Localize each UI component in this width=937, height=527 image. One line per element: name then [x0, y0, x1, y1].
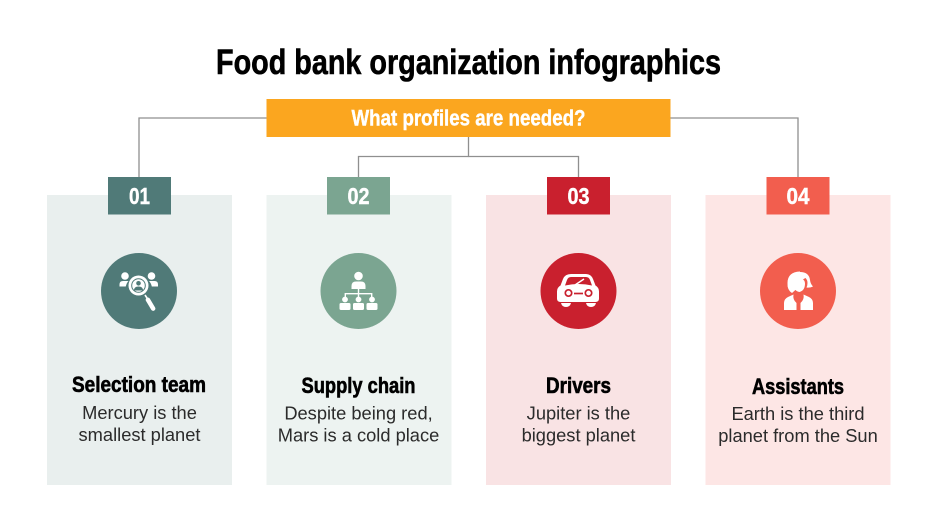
heading: supply chain: Supply chain	[302, 373, 416, 398]
connector lines	[139, 118, 798, 177]
text: selection team description: Mercury is the	[82, 402, 197, 423]
heading: selection team: Selection team	[72, 372, 206, 397]
panel: assistants	[706, 177, 890, 485]
panel: supply chain	[266, 177, 452, 485]
number badge 03: 03	[568, 183, 590, 209]
number badge 04	[766, 177, 830, 214]
icon: woman assistant	[760, 253, 836, 329]
number badge 02: 02	[348, 183, 370, 209]
icon: car	[540, 253, 616, 329]
text: assistants description	[718, 403, 878, 446]
text: drivers description: Jupiter is the	[527, 402, 630, 424]
text: drivers description	[522, 402, 635, 446]
number badge 04: 04	[786, 183, 810, 209]
header banner	[266, 99, 670, 137]
text: selection team description: smallest planet	[79, 424, 200, 445]
text: assistants description: Earth is the third	[731, 403, 865, 424]
icon: magnifier over people	[101, 253, 177, 329]
text: supply chain description: Mars is a cold place	[278, 424, 439, 446]
text: assistants description: planet from the Sun	[718, 425, 878, 446]
number badge 02	[327, 177, 390, 214]
panel: drivers	[486, 177, 671, 485]
number badge 01: 01	[129, 183, 150, 209]
title: Food bank organization infographics	[216, 43, 721, 82]
icon: org chart	[320, 253, 396, 329]
text: selection team description	[79, 402, 200, 445]
heading: assistants: Assistants	[752, 374, 844, 399]
heading: drivers: Drivers	[546, 373, 611, 398]
panel: selection team	[47, 177, 232, 485]
text: supply chain description: Despite being red,	[284, 402, 433, 424]
number badge 01	[108, 177, 171, 214]
text: drivers description: biggest planet	[522, 424, 635, 446]
text: supply chain description	[278, 402, 439, 446]
header banner: What profiles are needed?	[352, 106, 586, 130]
number badge 03	[547, 177, 610, 214]
